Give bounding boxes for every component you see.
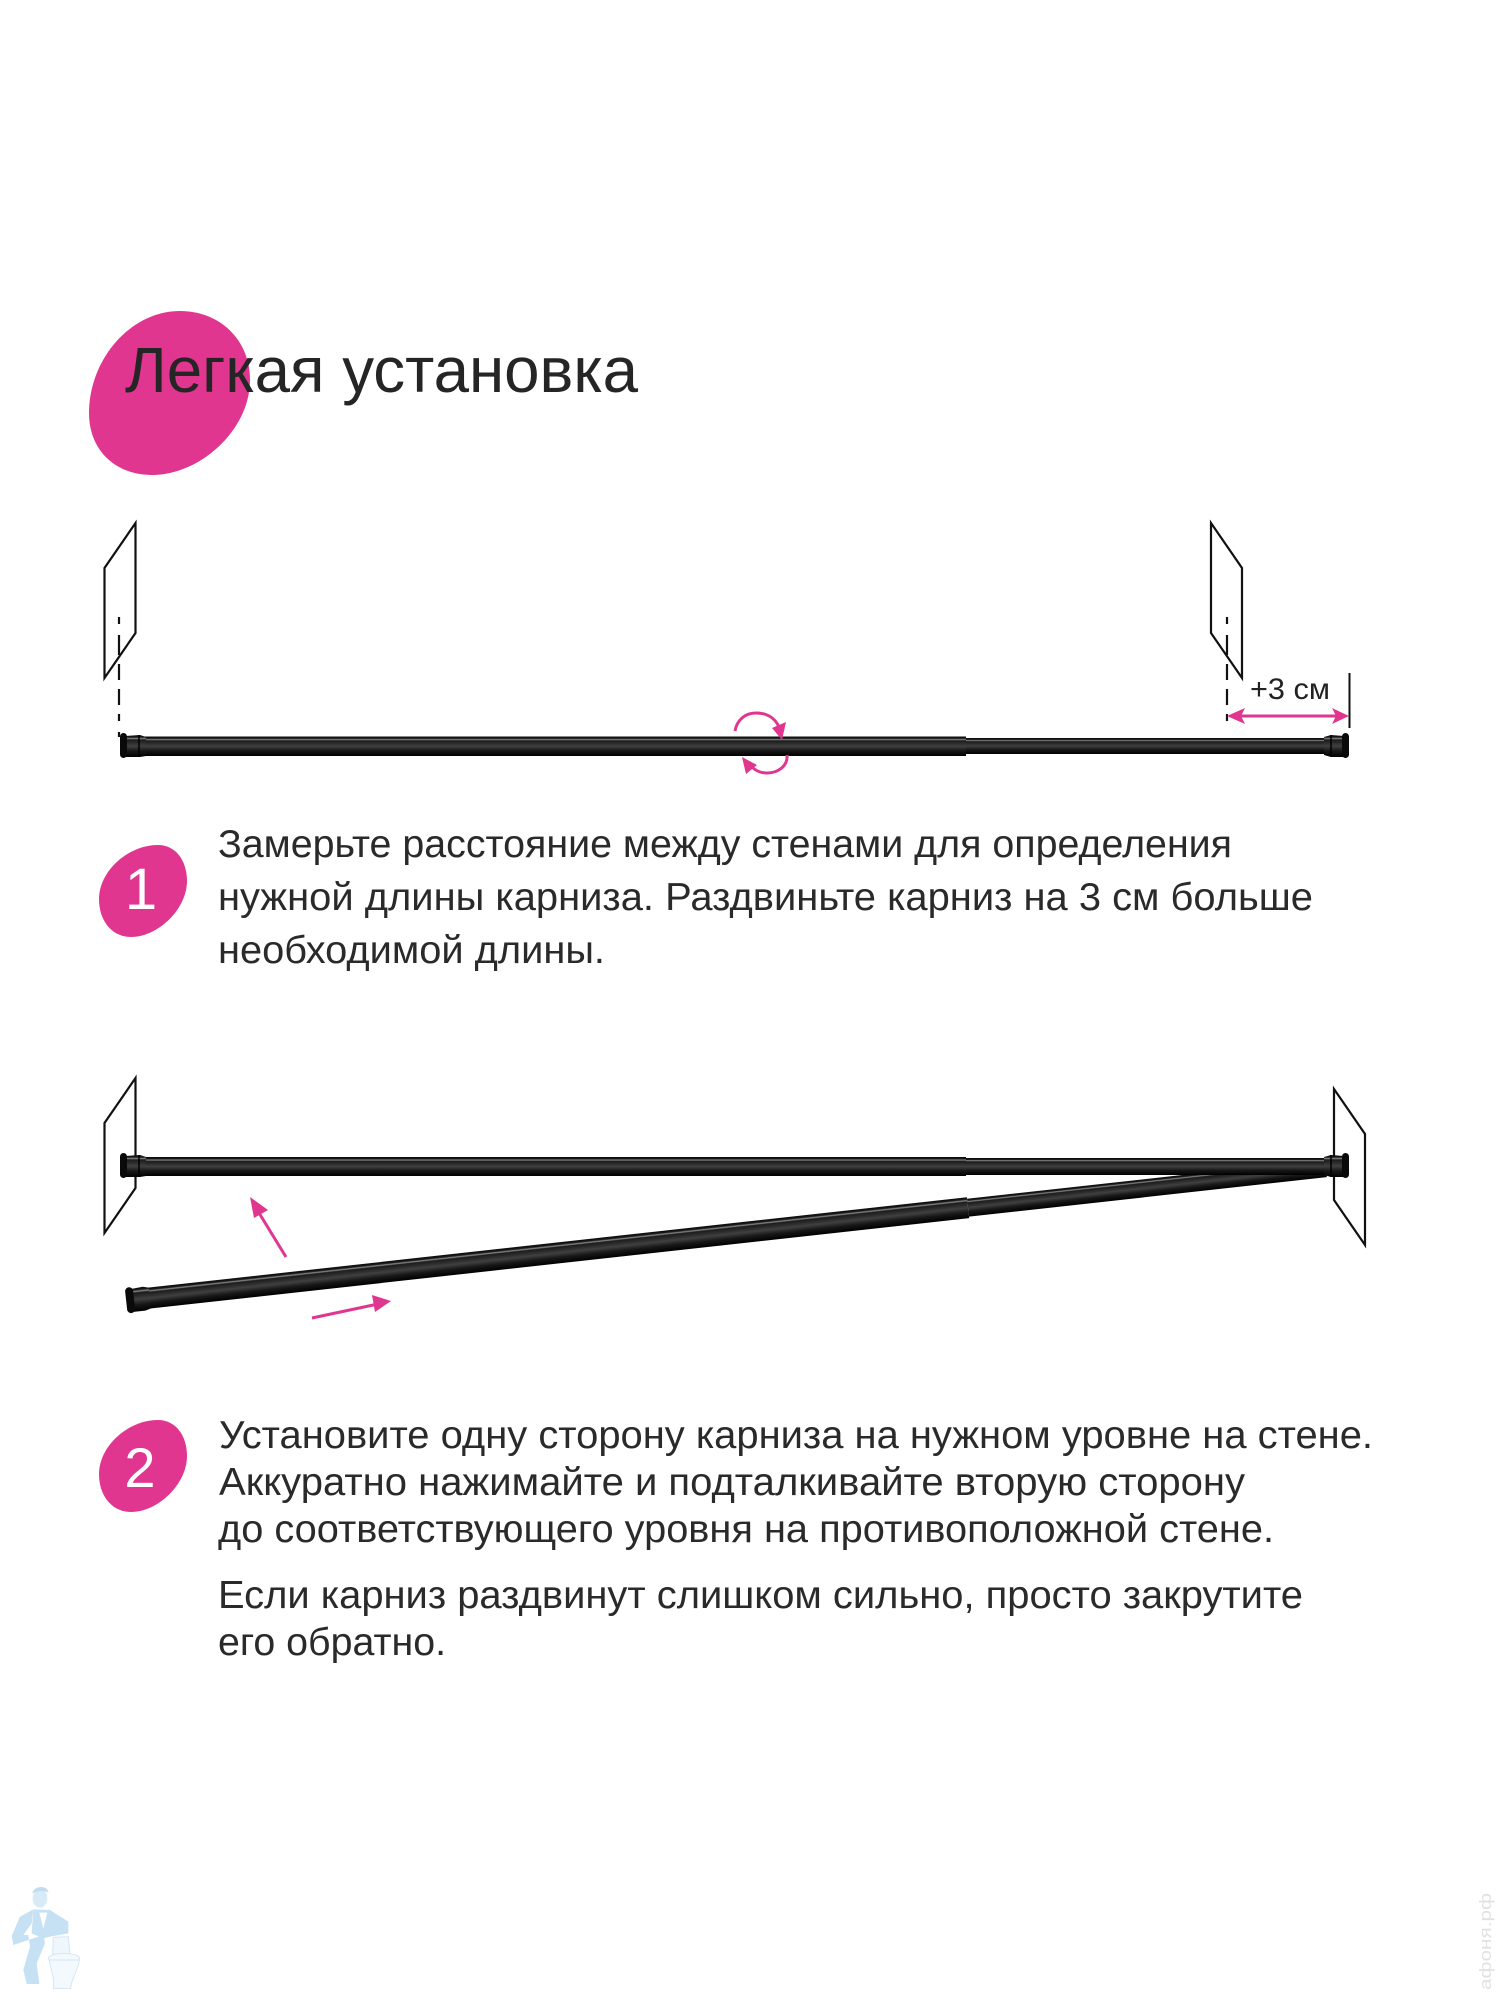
number badge 2: 2	[124, 1436, 156, 1499]
slanted rod	[125, 1155, 1327, 1314]
step 2 text: его обратно.	[218, 1621, 446, 1664]
watermark mascot plumber	[12, 1887, 80, 1988]
pink blob behind title	[89, 311, 250, 475]
step 1 text: необходимой длины.	[218, 929, 605, 972]
step 2 text: до соответствующего уровня на противоположной стене.	[218, 1508, 1274, 1551]
plus 3 cm measure	[1227, 673, 1350, 728]
number badge 2	[99, 1420, 187, 1512]
plus 3 cm measure: +3 см	[1250, 673, 1330, 706]
arrow up-left	[250, 1197, 286, 1257]
step 2 illustration	[104, 1078, 1365, 1318]
step 1 text: нужной длины карниза. Раздвиньте карниз на 3 см больше	[218, 876, 1313, 919]
step 1 illustration	[104, 523, 1350, 774]
watermark site name: афоня.рф	[1476, 1893, 1495, 1990]
right dashed guide	[1226, 617, 1228, 729]
left dashed guide	[118, 617, 120, 737]
step 1 text: Замерьте расстояние между стенами для определения	[218, 823, 1232, 866]
rod	[120, 733, 1349, 758]
right wall	[1334, 1089, 1365, 1245]
step 2 text: Если карниз раздвинут слишком сильно, просто закрутите	[218, 1574, 1303, 1617]
left wall	[104, 1078, 136, 1233]
right wall	[1211, 523, 1242, 678]
title: Легкая установка	[125, 334, 638, 406]
arrow right	[312, 1295, 391, 1318]
step 2 text	[218, 1414, 1373, 1664]
step 2 text: Аккуратно нажимайте и подталкивайте вторую сторону	[219, 1461, 1246, 1504]
left wall	[104, 523, 136, 678]
step 2 text: Установите одну сторону карниза на нужном уровне на стене.	[219, 1414, 1373, 1457]
step 1 text	[218, 823, 1313, 972]
rotation arrows	[735, 713, 787, 774]
upper rod	[120, 1153, 1349, 1178]
number badge 1: 1	[125, 857, 157, 922]
number badge 1	[99, 845, 187, 937]
